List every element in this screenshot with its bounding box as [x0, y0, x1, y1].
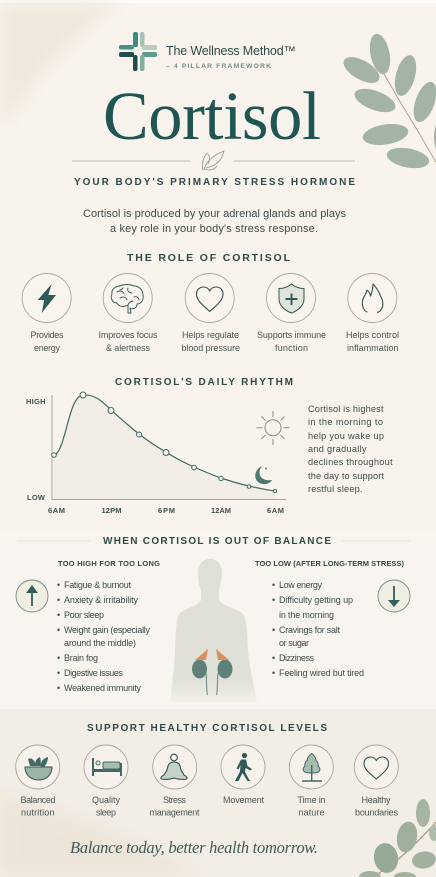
symptom list: too high: [57, 580, 150, 693]
label: focus: [98, 330, 158, 353]
chart: daily rhythm: [26, 392, 290, 515]
icon: up arrow: [16, 580, 48, 612]
label: stress management: management: [150, 808, 200, 818]
brand name: The Wellness Method™: [166, 44, 296, 58]
label: sleep: [92, 795, 120, 818]
symptom list: too low: •: [272, 595, 275, 605]
axis labels: HIGH: [26, 397, 46, 406]
symptom list: too high: Brain fog: [64, 653, 98, 663]
panel: support: [16, 745, 398, 818]
symptom list: too high: •: [57, 683, 60, 693]
axis labels: 6PM: [158, 506, 175, 515]
symptom list: too low: •: [272, 653, 275, 663]
heading: out of balance: WHEN CORTISOL IS OUT OF BALANCE: [103, 536, 331, 547]
adrenal gland: left: [195, 649, 208, 660]
symptom list: too high: Anxiety & irritability: [64, 595, 138, 605]
label: immune function: Supports immune: [257, 330, 326, 340]
label: inflammation: Helps control: [346, 330, 399, 340]
icon: heart outline: [354, 745, 398, 789]
label: movement: Movement: [223, 795, 264, 805]
decorative eucalyptus: bottom right: [359, 799, 436, 877]
label: sleep: Quality: [92, 795, 120, 805]
symptom list: too high: •: [57, 580, 60, 590]
symptom list: too low: Low energy: [279, 580, 322, 590]
label: time in nature: nature: [298, 808, 324, 818]
label: time in nature: Time in: [298, 795, 326, 805]
label: provides energy: [30, 330, 64, 353]
icon: brain: [103, 274, 152, 322]
axis labels: [26, 397, 284, 515]
icon: down arrow: [378, 580, 410, 612]
decorative branch: top right: [339, 32, 436, 171]
data points: [52, 392, 277, 493]
closing tagline: Balance today, better health tomorrow.: [70, 838, 318, 857]
ureters: [206, 673, 218, 695]
axis labels: 12PM: [102, 506, 122, 515]
label: blood pressure: [182, 330, 240, 353]
symptom list: too low: or sugar: [279, 638, 309, 648]
label: nutrition: [20, 795, 56, 818]
label: boundaries: [355, 795, 398, 818]
heading: the role of cortisol: THE ROLE OF CORTISOL: [127, 252, 291, 264]
symptom list: too high: around the middle): [64, 638, 136, 648]
label: time in nature: [298, 795, 326, 818]
label: inflammation: [346, 330, 399, 353]
axis labels: 12AM: [211, 506, 231, 515]
label: inflammation: inflammation: [347, 343, 398, 353]
symptom list: too high: Fatigue & burnout: [64, 580, 131, 590]
icon: meditation: [153, 745, 197, 789]
label: focus: & alertness: [106, 343, 150, 353]
rhythm description: declines throughout: [308, 457, 393, 467]
label: boundaries: boundaries: [355, 808, 398, 818]
icon: flame: [348, 274, 397, 322]
symptom list: too high: Weight gain (especially: [64, 625, 150, 635]
icon: walking figure: [221, 745, 265, 789]
symptom list: too low: Cravings for salt: [279, 625, 340, 635]
rhythm description: the day to support: [308, 471, 384, 481]
subtitle: YOUR BODY'S PRIMARY STRESS HORMONE: [74, 177, 355, 188]
divider with leaf: [72, 151, 355, 170]
label: blood pressure: blood pressure: [182, 343, 240, 353]
label: immune function: function: [275, 343, 308, 353]
symptom list: too high: •: [57, 610, 60, 620]
panel: role of cortisol: [22, 274, 399, 353]
symptom list: too low: •: [272, 580, 275, 590]
brand tagline: – 4 PILLAR FRAMEWORK: [166, 63, 271, 70]
symptom list: too high: Digestive issues: [64, 668, 124, 678]
symptom list: too low: •: [272, 625, 275, 635]
label: stress management: Stress: [163, 795, 186, 805]
intro text: Cortisol is produced by your adrenal glands and plays: [83, 208, 346, 220]
body silhouette: [170, 559, 257, 702]
symptom list: too low: Dizziness: [279, 653, 314, 663]
kidney: left: [192, 660, 207, 678]
axis labels: 6AM: [48, 506, 65, 515]
intro text: a key role in your body's stress response.: [110, 223, 318, 235]
icon: nutrition bowl: [16, 745, 60, 789]
heading: daily rhythm: CORTISOL'S DAILY RHYTHM: [115, 377, 293, 388]
subheading: too low: TOO LOW (AFTER LONG-TERM STRESS): [255, 559, 404, 568]
label: nutrition: Balanced: [20, 795, 56, 805]
symptom list: too low: Difficulty getting up: [279, 595, 353, 605]
heading: support healthy cortisol levels: SUPPORT HEALTHY CORTISOL LEVELS: [87, 723, 327, 734]
axis labels: 6AM: [267, 506, 284, 515]
figure: body with kidneys and adrenal glands: [170, 559, 257, 702]
subheading: too high: TOO HIGH FOR TOO LONG: [58, 559, 160, 568]
label: boundaries: Healthy: [362, 795, 391, 805]
icon: shield: [266, 274, 316, 322]
icon: sun: [256, 411, 290, 445]
rhythm description: and gradually: [308, 444, 367, 454]
symptom list: too low: •: [272, 668, 275, 678]
symptom list: too low: in the morning: [279, 610, 334, 620]
area fill: [54, 395, 275, 499]
label: blood pressure: Helps regulate: [182, 330, 239, 340]
panel: too low: [255, 559, 410, 678]
label: sleep: sleep: [96, 808, 116, 818]
symptom list: too high: Poor sleep: [64, 610, 104, 620]
label: nutrition: nutrition: [21, 808, 54, 818]
symptom list: too high: •: [57, 653, 60, 663]
label: stress management: [150, 795, 200, 818]
intro text: [83, 208, 346, 235]
label: provides energy: Provides: [30, 330, 64, 340]
icon: bed: [84, 745, 128, 789]
icon: cross logo: [119, 32, 157, 71]
symptom list: too high: •: [57, 668, 60, 678]
label: focus: Improves focus: [98, 330, 158, 340]
icon: energy bolt: [22, 274, 71, 322]
symptom list: too low: Feeling wired but tired: [279, 668, 364, 678]
logo: [119, 32, 296, 71]
adrenal gland: right: [216, 649, 229, 660]
panel: too high: [16, 559, 160, 693]
rhythm description: Cortisol is highest: [308, 404, 384, 414]
icon: moon: [255, 466, 272, 484]
rhythm description: [308, 404, 393, 494]
label: provides energy: energy: [34, 343, 60, 353]
symptom list: too high: •: [57, 625, 60, 635]
rhythm description: help you wake up: [308, 431, 384, 441]
kidney: right: [218, 660, 232, 678]
rhythm description: in the morning to: [308, 417, 383, 427]
rhythm curve: [54, 395, 275, 491]
label: immune function: [257, 330, 326, 353]
rhythm description: restful sleep.: [308, 484, 362, 494]
icon: heart: [185, 274, 234, 322]
axis labels: LOW: [27, 493, 46, 502]
symptom list: too high: Weakened immunity: [64, 683, 142, 693]
symptom list: too high: •: [57, 595, 60, 605]
symptom list: too low: [272, 580, 364, 678]
icon: tree: [289, 745, 333, 789]
title: Cortisol: [103, 78, 321, 154]
